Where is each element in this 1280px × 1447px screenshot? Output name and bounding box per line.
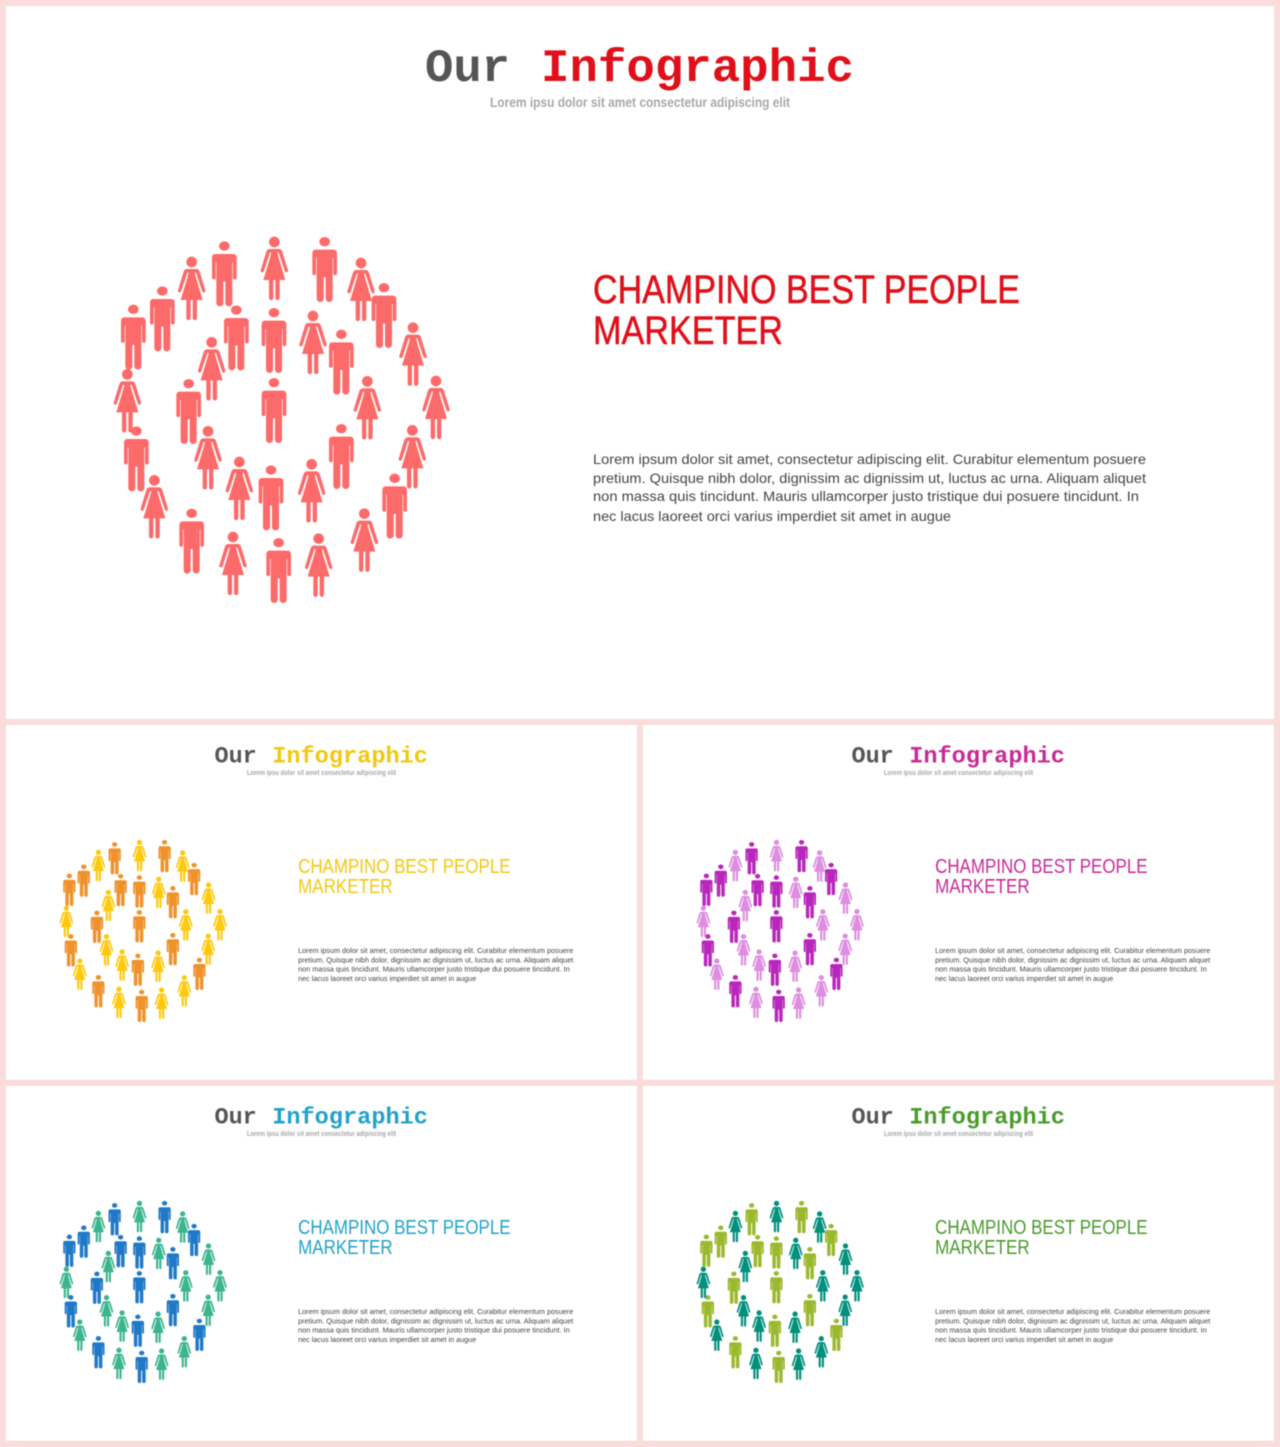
title: Infographic xyxy=(272,1104,428,1130)
men figures xyxy=(63,1201,206,1383)
panel: green infographic xyxy=(643,1086,1274,1441)
title: Infographic xyxy=(541,43,854,95)
men figures xyxy=(700,1201,843,1383)
body text xyxy=(935,948,1210,983)
panel: yellow infographic xyxy=(6,725,637,1080)
people circle graphic xyxy=(697,840,864,1022)
body text: non massa quis tincidunt. Mauris ullamcorper justo tristique dui posuere tincidunt. In xyxy=(935,966,1207,973)
subtitle: Lorem ipsu dolor sit amet consectetur adipiscing elit xyxy=(490,94,790,110)
body text: Lorem ipsum dolor sit amet, consectetur adipiscing elit. Curabitur elementum posuere xyxy=(298,1309,573,1316)
body text: pretium. Quisque nibh dolor, dignissim ac dignissim ut, luctus ac urna. Aliquam aliquet xyxy=(298,1318,573,1325)
body text: non massa quis tincidunt. Mauris ullamcorper justo tristique dui posuere tincidunt. In xyxy=(593,488,1139,504)
title: Our xyxy=(851,1104,894,1130)
body text: pretium. Quisque nibh dolor, dignissim ac dignissim ut, luctus ac urna. Aliquam aliquet xyxy=(593,470,1146,486)
heading: CHAMPINO BEST PEOPLE xyxy=(935,1217,1148,1239)
body text xyxy=(593,451,1146,524)
heading: CHAMPINO BEST PEOPLE xyxy=(298,1217,511,1239)
subtitle: Lorem ipsu dolor sit amet consectetur adipiscing elit xyxy=(884,1131,1034,1138)
subtitle: Lorem ipsu dolor sit amet consectetur adipiscing elit xyxy=(884,770,1034,777)
people circle graphic xyxy=(114,237,450,603)
women figures xyxy=(697,1201,864,1380)
body text: nec lacus laoreet orci varius imperdiet sit amet in augue xyxy=(298,976,476,983)
body text: Lorem ipsum dolor sit amet, consectetur adipiscing elit. Curabitur elementum posuere xyxy=(935,1309,1210,1316)
title: Our xyxy=(214,1104,257,1130)
women figures xyxy=(697,840,864,1019)
body text: Lorem ipsum dolor sit amet, consectetur adipiscing elit. Curabitur elementum posuere xyxy=(298,948,573,955)
body text: Lorem ipsum dolor sit amet, consectetur adipiscing elit. Curabitur elementum posuere xyxy=(935,948,1210,955)
heading: MARKETER xyxy=(935,1237,1030,1259)
heading xyxy=(593,268,1020,353)
people circle graphic xyxy=(60,1201,227,1383)
title: Our xyxy=(851,743,894,769)
panel: large red infographic xyxy=(6,6,1274,719)
body text: non massa quis tincidunt. Mauris ullamcorper justo tristique dui posuere tincidunt. In xyxy=(935,1327,1207,1334)
body text: pretium. Quisque nibh dolor, dignissim ac dignissim ut, luctus ac urna. Aliquam aliquet xyxy=(935,1318,1210,1325)
panel: purple infographic xyxy=(643,725,1274,1080)
women figures xyxy=(60,840,227,1019)
body text: non massa quis tincidunt. Mauris ullamcorper justo tristique dui posuere tincidunt. In xyxy=(298,966,570,973)
people circle graphic xyxy=(697,1201,864,1383)
heading xyxy=(298,856,511,898)
heading xyxy=(935,1217,1148,1259)
women figures xyxy=(114,237,450,597)
panel: blue infographic xyxy=(6,1086,637,1441)
body text: nec lacus laoreet orci varius imperdiet sit amet in augue xyxy=(935,1337,1113,1344)
heading: MARKETER xyxy=(298,1237,393,1259)
men figures xyxy=(63,840,206,1022)
heading: MARKETER xyxy=(298,876,393,898)
heading: CHAMPINO BEST PEOPLE xyxy=(593,268,1020,312)
body text: nec lacus laoreet orci varius imperdiet sit amet in augue xyxy=(298,1337,476,1344)
body text xyxy=(298,948,573,983)
body text: nec lacus laoreet orci varius imperdiet sit amet in augue xyxy=(593,508,951,524)
subtitle: Lorem ipsu dolor sit amet consectetur adipiscing elit xyxy=(247,1131,397,1138)
women figures xyxy=(60,1201,227,1380)
heading: CHAMPINO BEST PEOPLE xyxy=(298,856,511,878)
title: Our xyxy=(425,43,510,95)
title: Infographic xyxy=(272,743,428,769)
heading xyxy=(935,856,1148,898)
body text xyxy=(298,1309,573,1344)
body text: Lorem ipsum dolor sit amet, consectetur adipiscing elit. Curabitur elementum posuere xyxy=(593,451,1146,467)
men figures xyxy=(700,840,843,1022)
heading: MARKETER xyxy=(935,876,1030,898)
men figures xyxy=(121,237,407,603)
title: Infographic xyxy=(909,743,1065,769)
people circle graphic xyxy=(60,840,227,1022)
body text: pretium. Quisque nibh dolor, dignissim ac dignissim ut, luctus ac urna. Aliquam aliquet xyxy=(298,957,573,964)
heading: MARKETER xyxy=(593,309,783,353)
body text xyxy=(935,1309,1210,1344)
title: Our xyxy=(214,743,257,769)
title: Infographic xyxy=(909,1104,1065,1130)
body text: non massa quis tincidunt. Mauris ullamcorper justo tristique dui posuere tincidunt. In xyxy=(298,1327,570,1334)
body text: nec lacus laoreet orci varius imperdiet sit amet in augue xyxy=(935,976,1113,983)
heading: CHAMPINO BEST PEOPLE xyxy=(935,856,1148,878)
heading xyxy=(298,1217,511,1259)
body text: pretium. Quisque nibh dolor, dignissim ac dignissim ut, luctus ac urna. Aliquam aliquet xyxy=(935,957,1210,964)
subtitle: Lorem ipsu dolor sit amet consectetur adipiscing elit xyxy=(247,770,397,777)
